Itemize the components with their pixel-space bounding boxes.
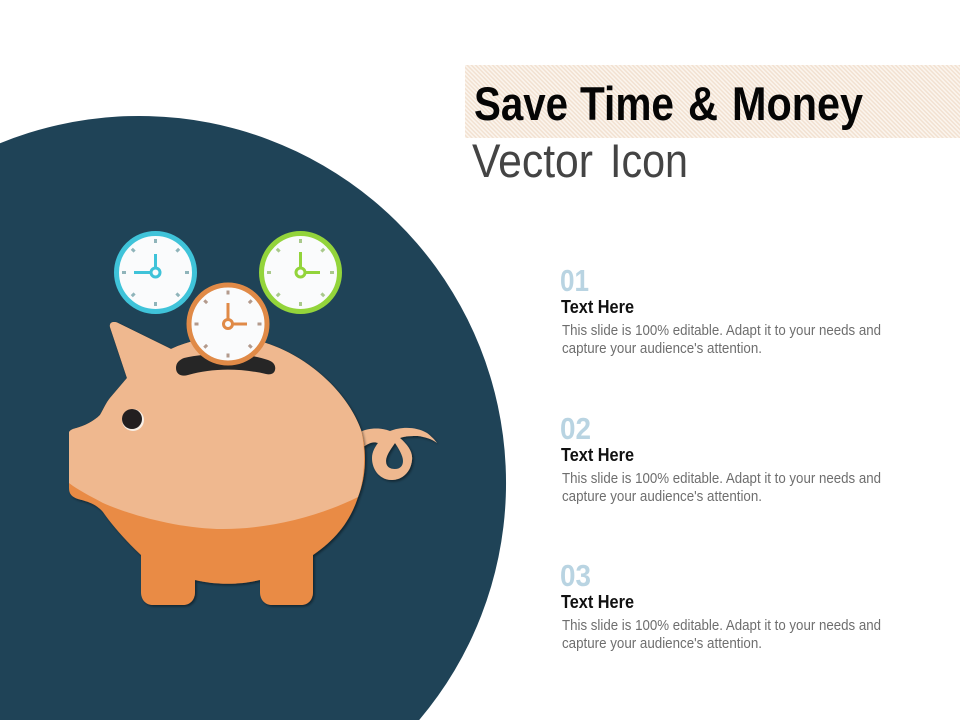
item 02 xyxy=(560,411,881,505)
pig eye xyxy=(122,409,144,431)
dark blue background circle xyxy=(0,116,506,720)
item 02: capture your audience's attention. xyxy=(562,488,762,505)
pig upper body highlight xyxy=(69,322,364,529)
item 01: 01 xyxy=(560,263,589,298)
pig tail xyxy=(360,428,437,480)
subtitle: Vector Icon: Vector xyxy=(472,134,593,187)
item 03: 03 xyxy=(560,558,591,593)
item 01 xyxy=(560,263,881,357)
title: Save Time & Money: Time xyxy=(580,77,674,130)
item 02: 02 xyxy=(560,411,591,446)
coin slot xyxy=(176,354,275,376)
clock: green xyxy=(262,234,340,312)
subtitle: Vector Icon xyxy=(472,134,688,187)
item 03: Text Here xyxy=(561,592,634,612)
title: Save Time & Money xyxy=(474,77,863,130)
title: Save Time & Money: & xyxy=(688,77,718,130)
item 02: Text Here xyxy=(561,445,634,465)
title: Save Time & Money: Save xyxy=(474,77,568,130)
subtitle: Vector Icon: Icon xyxy=(610,134,688,187)
icon: piggy bank with clocks xyxy=(69,234,437,605)
pig body xyxy=(69,322,365,605)
item 01: capture your audience's attention. xyxy=(562,340,762,357)
item 03 xyxy=(560,558,881,652)
item 01: This slide is 100% editable. Adapt it to your needs and xyxy=(562,322,881,339)
title banner xyxy=(465,65,960,138)
item 03: This slide is 100% editable. Adapt it to your needs and xyxy=(562,617,881,634)
item 03: capture your audience's attention. xyxy=(562,635,762,652)
title: Save Time & Money: Money xyxy=(732,77,863,130)
clock: orange xyxy=(189,285,267,363)
clock: blue xyxy=(116,234,194,312)
item 01: Text Here xyxy=(561,297,634,317)
item 02: This slide is 100% editable. Adapt it to your needs and xyxy=(562,470,881,487)
